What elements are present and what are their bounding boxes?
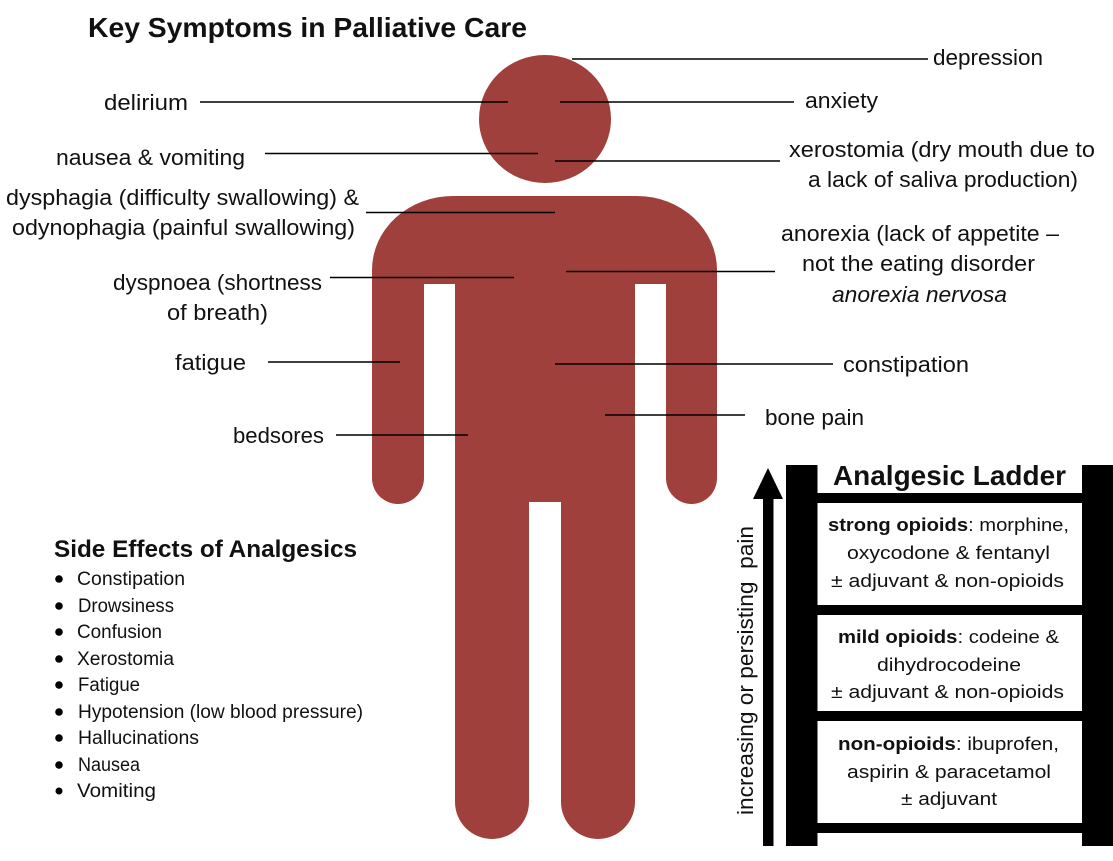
symptom labels: left: delirium [104,90,188,115]
title: Key Symptoms in Palliative Care [88,12,527,43]
symptom labels: right: depression [933,45,1043,70]
symptom labels: right: constipation [843,352,969,377]
rung: non-opioids [838,733,1059,809]
symptom labels: right: not the eating disorder [802,251,1035,276]
ladder frame [786,465,1113,846]
symptom labels: left: bedsores [233,423,324,448]
rung: mild opioids: dihydrocodeine [877,654,1021,675]
rung: strong opioids: ± adjuvant & non-opioids [831,570,1064,591]
symptom labels: right: a lack of saliva production) [808,167,1078,192]
side effects list: Hypotension (low blood pressure) [78,702,363,723]
symptom leader lines [200,59,928,435]
rung: mild opioids: ± adjuvant & non-opioids [831,681,1064,702]
arrow: increasing or persisting pain [753,468,783,846]
analgesic ladder [786,460,1113,846]
rung: strong opioids: oxycodone & fentanyl [847,542,1050,563]
symptom labels: right: anorexia (lack of appetite – [781,221,1060,246]
side effects list: Fatigue [78,675,140,696]
rung: non-opioids: ± adjuvant [901,788,997,809]
arrow label: increasing or persisting pain [733,526,758,815]
symptom labels: left: dysphagia (difficulty swallowing) & [6,185,359,210]
ladder heading: Analgesic Ladder [833,460,1066,491]
side effects list: Xerostomia [77,649,174,670]
symptom labels: left: odynophagia (painful swallowing) [12,215,355,240]
rung: mild opioids: mild opioids : codeine & [838,626,1060,647]
side effects list: Hallucinations [78,728,199,749]
side effects heading: Side Effects of Analgesics [54,536,357,563]
symptom labels: left [6,90,359,448]
symptom labels: left: fatigue [175,350,246,375]
symptom labels: left: of breath) [167,300,268,325]
rung: strong opioids: strong opioids : morphine, [828,514,1069,535]
symptom labels: right: anxiety [805,88,878,113]
human figure [372,55,717,839]
symptom labels: right: xerostomia (dry mouth due to [789,137,1095,162]
symptom labels: left: nausea & vomiting [56,145,245,170]
side effects list: Vomiting [77,781,156,802]
rung: non-opioids: non-opioids : ibuprofen, [838,733,1059,754]
symptom labels: right [765,45,1095,430]
side effects list: Constipation [77,569,185,590]
side effects list: Drowsiness [78,596,174,617]
side effects list: Confusion [77,622,162,643]
rung: strong opioids [828,514,1069,591]
symptom labels: right: anorexia nervosa [832,282,1007,307]
side effects list [55,569,363,802]
side effects list: Nausea [78,755,140,776]
symptom labels: right: bone pain [765,405,864,430]
rung: non-opioids: aspirin & paracetamol [847,761,1051,782]
symptom labels: left: dyspnoea (shortness [113,270,322,295]
rung: mild opioids [831,626,1064,702]
